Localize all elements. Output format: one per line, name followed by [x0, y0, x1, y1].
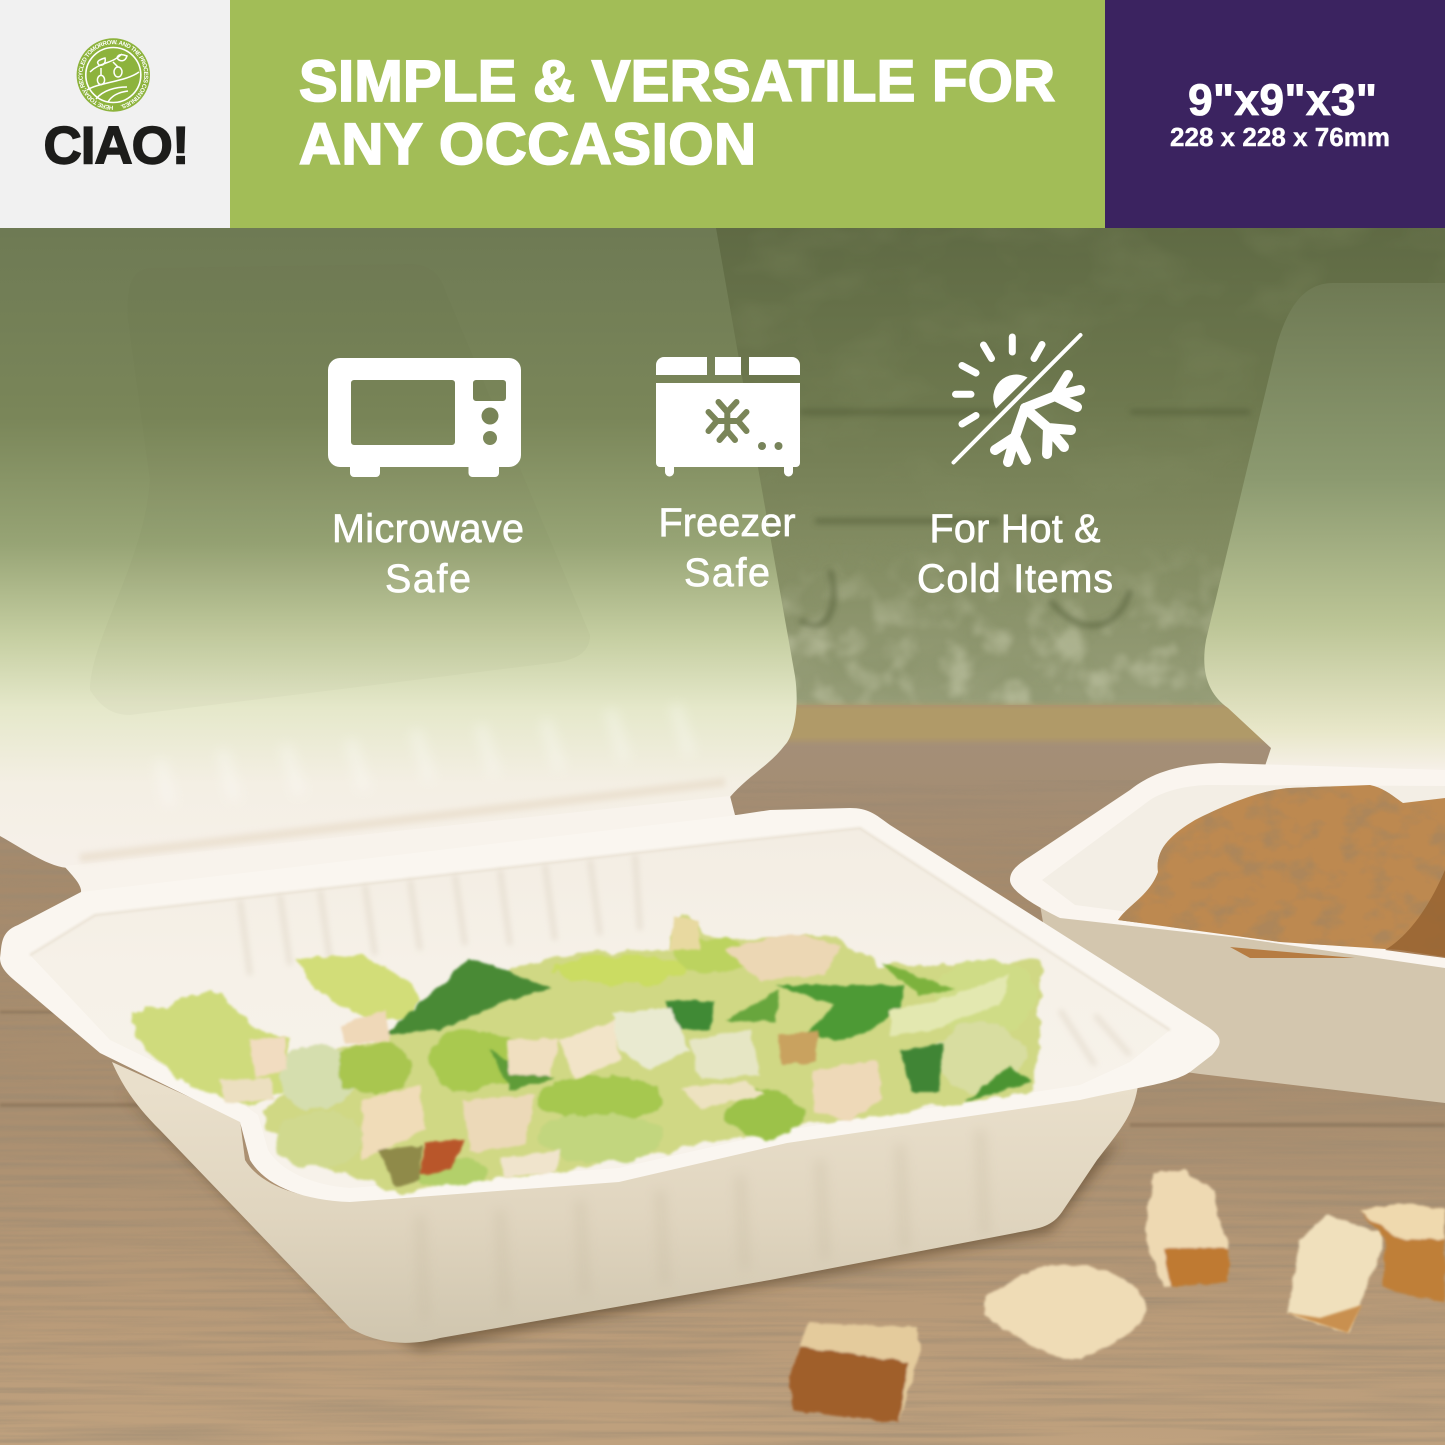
right box interior	[1042, 785, 1445, 950]
interior	[30, 828, 1170, 1188]
icon: microwave	[328, 358, 521, 477]
caesar salad	[131, 915, 1040, 1192]
header: size panel	[1105, 0, 1445, 228]
right background container	[1010, 283, 1445, 1103]
label: hot and cold	[917, 507, 1113, 601]
crouton 3	[789, 1323, 921, 1423]
right box side	[1040, 905, 1445, 1103]
rim	[0, 808, 1220, 1202]
hinge	[64, 796, 885, 910]
lid ribs	[160, 705, 690, 805]
left romaine leaf	[131, 990, 290, 1105]
dimensions in millimetres: 228 x 228 x 76mm	[1170, 122, 1390, 152]
right box rim	[1010, 763, 1445, 968]
outer wall	[112, 1062, 1138, 1343]
photo background: wooden table	[0, 705, 1445, 1445]
crouton 2	[985, 1265, 1146, 1358]
label: freezer safe: Safe	[684, 551, 770, 595]
main container body	[0, 782, 1220, 1350]
photo background: wall	[716, 228, 1445, 705]
feature: microwave safe	[328, 358, 524, 601]
dimensions in inches: 9"x9"x3"	[1188, 76, 1377, 125]
left open lid	[0, 228, 797, 868]
lid crease	[80, 782, 725, 858]
lid inner panel	[90, 264, 590, 715]
crouton 1	[1145, 1170, 1229, 1287]
header: logo panel	[0, 0, 230, 228]
back romaine leaf	[294, 952, 420, 1020]
label: freezer safe	[658, 501, 796, 595]
grilled chicken	[1118, 785, 1445, 958]
contact shadow	[120, 1090, 1120, 1350]
interior ribs	[240, 855, 1130, 1065]
feature: hot and cold	[917, 335, 1113, 601]
logo badge: HERE TODAY, RECYCLED TOMORROW. AND THE PROCESS CONTINUES.	[78, 40, 148, 110]
croutons	[789, 1170, 1445, 1423]
crouton 4	[1287, 1215, 1382, 1333]
title	[299, 49, 1055, 177]
label: microwave safe: Microwave	[332, 507, 524, 551]
label: microwave safe	[332, 507, 524, 601]
label: hot and cold: For Hot &	[930, 507, 1100, 551]
title: SIMPLE & VERSATILE FOR	[299, 49, 1055, 114]
logo wordmark: CIAO!	[44, 116, 190, 176]
icon: chest freezer	[656, 357, 800, 477]
header: title panel	[230, 0, 1105, 228]
dark leaf accents	[385, 958, 552, 1035]
icon: sun and snowflake	[954, 335, 1080, 462]
dressing and croutons	[250, 1037, 287, 1078]
title: ANY OCCASION	[299, 112, 756, 177]
label: hot and cold: Cold Items	[917, 557, 1113, 601]
label: microwave safe: Safe	[385, 557, 471, 601]
right lid	[1204, 283, 1445, 795]
label: freezer safe: Freezer	[658, 501, 796, 545]
crouton 5	[1360, 1203, 1445, 1303]
lettuce mass	[262, 915, 1040, 1192]
feature: freezer safe	[656, 357, 800, 595]
